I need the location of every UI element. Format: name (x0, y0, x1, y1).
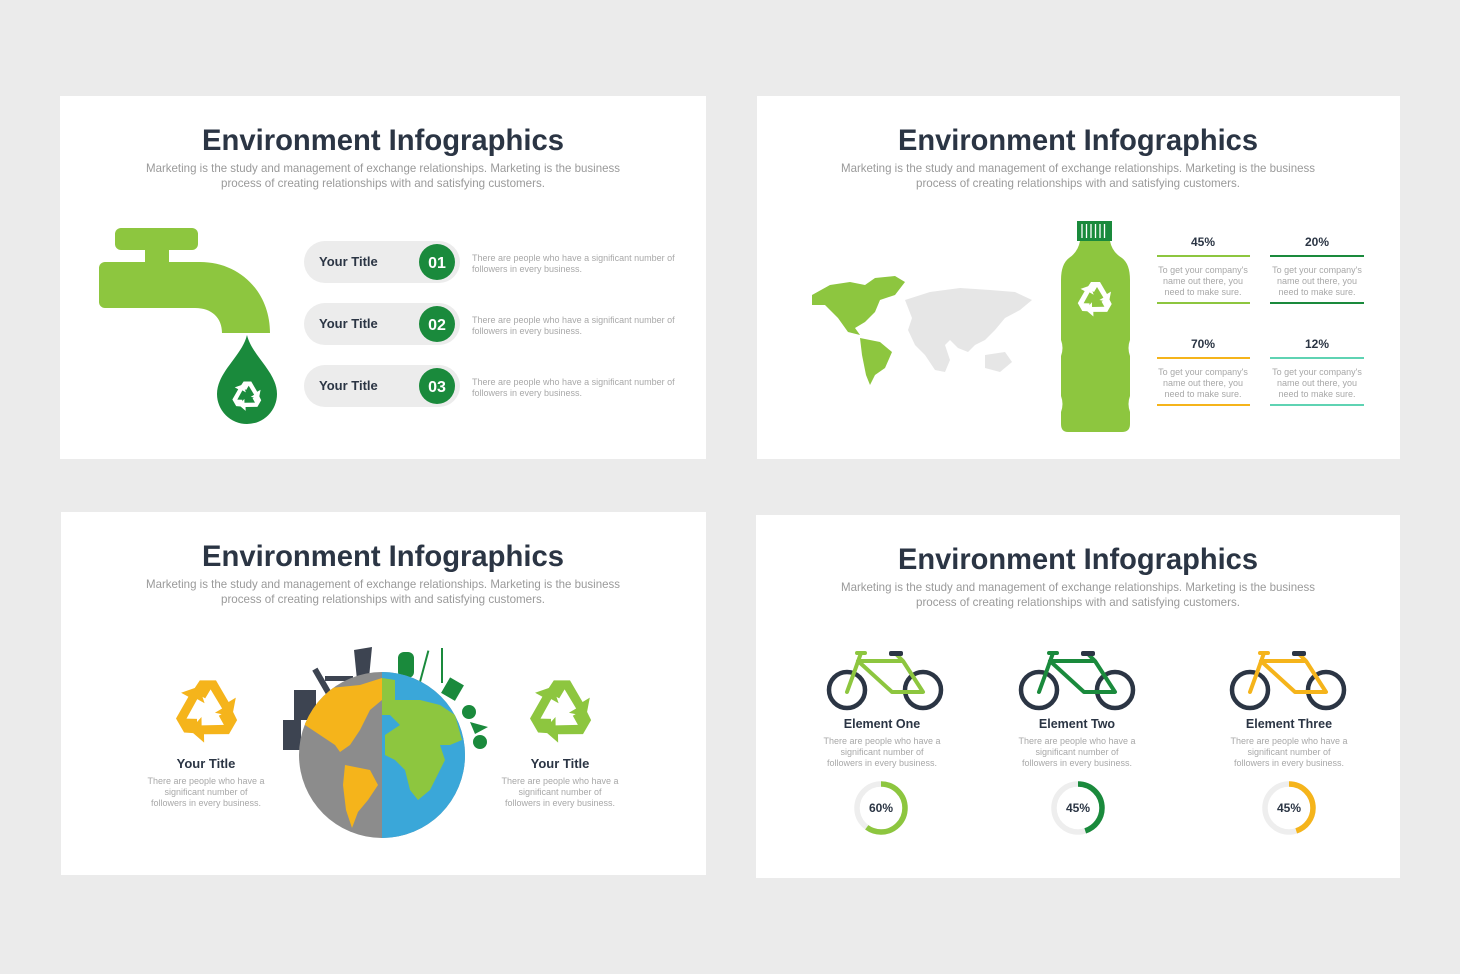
list item 03: Your Title (319, 378, 378, 393)
donut 45% green: 45% (1066, 801, 1090, 815)
donut 60% (857, 784, 905, 832)
text: right item (501, 756, 619, 808)
subtitle: process of creating relationships with and satisfying customers. (916, 595, 1240, 609)
stat 20% (1270, 235, 1364, 304)
subtitle: Marketing is the study and management of exchange relationships. Marketing is the business (146, 577, 620, 591)
text: left item: Your Title (177, 756, 235, 771)
text: element one: Element One (844, 717, 920, 731)
text: element three (1230, 717, 1348, 768)
panel: globe (61, 512, 706, 875)
subtitle: process of creating relationships with and satisfying customers. (221, 176, 545, 190)
text: right item: There are people who have a (501, 776, 619, 786)
stat 20%: 20% (1305, 235, 1329, 249)
icon: skyline (283, 647, 488, 750)
stat 20%: To get your company's (1272, 265, 1362, 275)
text: element two: significant number of (1035, 747, 1119, 757)
subtitle (146, 577, 620, 606)
subtitle: Marketing is the study and management of exchange relationships. Marketing is the business (841, 161, 1315, 175)
donut 45% green (1054, 784, 1102, 832)
world map (812, 276, 1032, 385)
donut 60%: 60% (869, 801, 893, 815)
icon: yellow recycle (166, 680, 241, 751)
panel: faucet (60, 96, 706, 459)
text: element three: Element Three (1246, 717, 1332, 731)
text: element one (823, 717, 941, 768)
subtitle: process of creating relationships with and satisfying customers. (916, 176, 1240, 190)
icon: globe (299, 672, 465, 838)
text: element one: significant number of (840, 747, 924, 757)
icon: recycle drop (217, 335, 277, 424)
text: element two: There are people who have a (1018, 736, 1136, 746)
subtitle (841, 161, 1315, 190)
subtitle (841, 580, 1315, 609)
bike two (1021, 651, 1133, 708)
subtitle: process of creating relationships with and satisfying customers. (221, 592, 545, 606)
subtitle: Marketing is the study and management of exchange relationships. Marketing is the business (841, 580, 1315, 594)
list item 02: There are people who have a significant number of (472, 315, 675, 325)
list item 02: 02 (428, 317, 446, 334)
stat 45%: name out there, you (1163, 276, 1243, 286)
text: element two: Element Two (1039, 717, 1115, 731)
stat 12% (1270, 337, 1364, 406)
title: Environment Infographics (202, 540, 564, 573)
text: element two (1018, 717, 1136, 768)
stat 70%: need to make sure. (1164, 389, 1242, 399)
bike three (1232, 651, 1344, 708)
list item 03: followers in every business. (472, 388, 582, 398)
list item 01: Your Title (319, 254, 378, 269)
list item 02: Your Title (319, 316, 378, 331)
text: left item: There are people who have a (147, 776, 265, 786)
stat 70% (1157, 337, 1250, 406)
title: Environment Infographics (898, 543, 1258, 576)
stat 45%: need to make sure. (1164, 287, 1242, 297)
list item 03: 03 (428, 379, 446, 396)
text: element two: followers in every business. (1022, 758, 1132, 768)
title: Environment Infographics (898, 124, 1258, 157)
list item 02 (304, 303, 675, 345)
stat 70%: To get your company's (1158, 367, 1248, 377)
list item 01 (304, 241, 675, 283)
list item 02: followers in every business. (472, 326, 582, 336)
stat 12%: need to make sure. (1278, 389, 1356, 399)
icon: faucet (99, 228, 270, 333)
bike one (829, 651, 941, 708)
text: right item: followers in every business. (505, 798, 615, 808)
list item 03 (304, 365, 675, 407)
donut 45% yellow (1265, 784, 1313, 832)
panel: bikes (756, 515, 1400, 878)
donut 45% yellow: 45% (1277, 801, 1301, 815)
text: element three: followers in every business. (1234, 758, 1344, 768)
stat 12%: To get your company's (1272, 367, 1362, 377)
stat 45% (1157, 235, 1250, 304)
subtitle (146, 161, 620, 190)
icon: bottle (1061, 221, 1130, 432)
list item 01: followers in every business. (472, 264, 582, 274)
list item 01: 01 (428, 255, 446, 272)
text: right item: Your Title (531, 756, 589, 771)
text: element one: There are people who have a (823, 736, 941, 746)
text: element one: followers in every business. (827, 758, 937, 768)
stat 45%: 45% (1191, 235, 1215, 249)
stat 12%: name out there, you (1277, 378, 1357, 388)
text: element three: There are people who have a (1230, 736, 1348, 746)
text: element three: significant number of (1247, 747, 1331, 757)
subtitle: Marketing is the study and management of exchange relationships. Marketing is the business (146, 161, 620, 175)
stat 12%: 12% (1305, 337, 1329, 351)
text: right item: significant number of (518, 787, 602, 797)
stat 20%: need to make sure. (1278, 287, 1356, 297)
text: left item (147, 756, 265, 808)
stat 70%: name out there, you (1163, 378, 1243, 388)
title: Environment Infographics (202, 124, 564, 157)
list item 01: There are people who have a significant number of (472, 253, 675, 263)
text: left item: significant number of (164, 787, 248, 797)
panel: bottle (757, 96, 1400, 459)
text: left item: followers in every business. (151, 798, 261, 808)
icon: green recycle (520, 680, 595, 751)
stat 20%: name out there, you (1277, 276, 1357, 286)
stat 70%: 70% (1191, 337, 1215, 351)
stat 45%: To get your company's (1158, 265, 1248, 275)
list item 03: There are people who have a significant number of (472, 377, 675, 387)
